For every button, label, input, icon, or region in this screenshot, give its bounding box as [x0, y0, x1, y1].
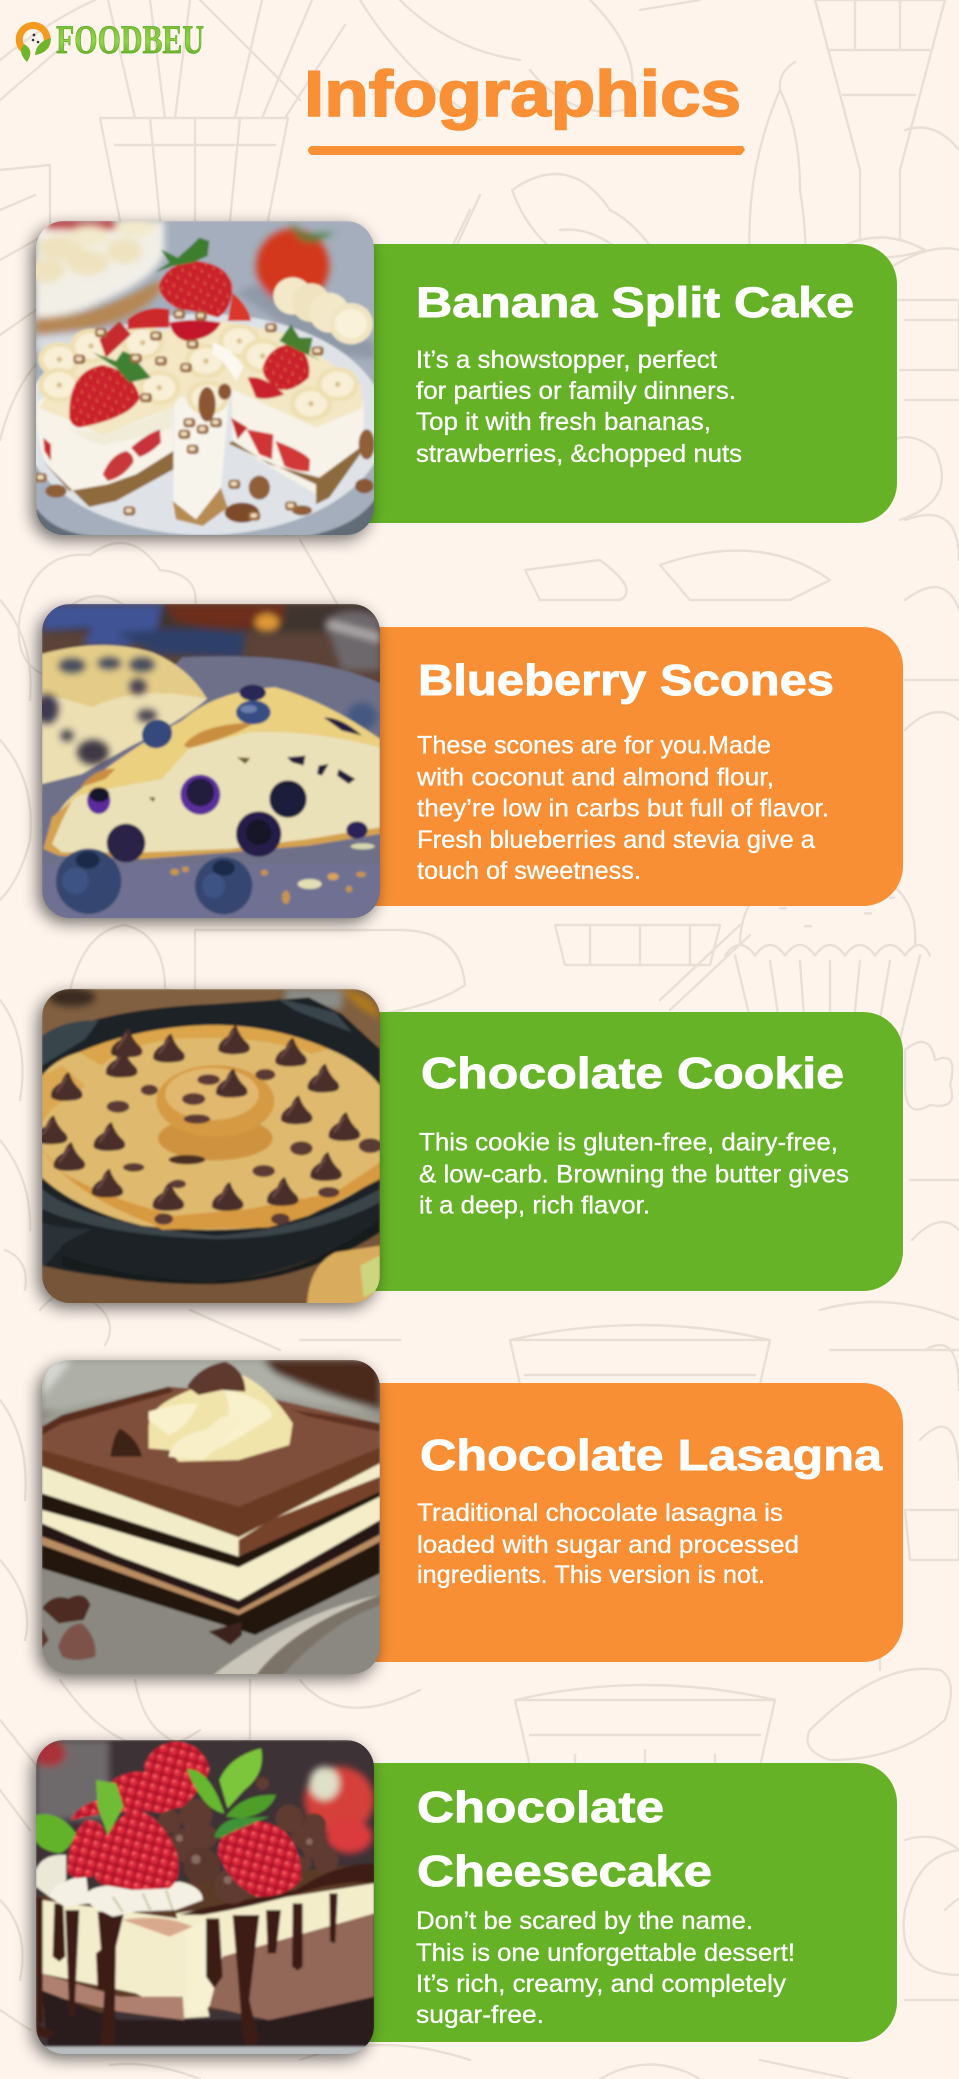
image shadow	[32, 226, 370, 540]
panel: blueberry scones	[35, 604, 903, 923]
description: for parties or family dinners.	[416, 377, 736, 405]
description: Fresh blueberries and stevia give a	[417, 826, 815, 854]
description: they’re low in carbs but full of flavor.	[417, 794, 829, 822]
heading: Cheesecake	[417, 1847, 712, 1896]
description: Top it with fresh bananas,	[416, 408, 711, 436]
description	[416, 1907, 795, 2029]
logo wordmark: FOODBEU	[56, 17, 204, 62]
heading: Banana Split Cake	[416, 279, 854, 327]
title underline	[308, 146, 745, 155]
heading	[417, 1783, 712, 1896]
card	[340, 627, 903, 906]
heading: Chocolate Lasagna	[420, 1431, 883, 1480]
card	[340, 1763, 897, 2042]
description	[419, 1128, 849, 1220]
image shadow	[32, 1745, 370, 2059]
panel: chocolate lasagna	[38, 1360, 903, 1679]
description: touch of sweetness.	[417, 857, 641, 885]
description: strawberries, &chopped nuts	[416, 440, 742, 468]
photo: chocolate cookie	[36, 988, 382, 1305]
card	[340, 1012, 903, 1291]
photo: blueberry scones	[35, 604, 382, 920]
heading: Blueberry Scones	[418, 656, 834, 705]
photo: chocolate lasagna	[42, 1360, 382, 1676]
logo icon	[19, 25, 51, 62]
description: Traditional chocolate lasagna is	[417, 1499, 783, 1527]
description: sugar-free.	[416, 2001, 544, 2029]
description: loaded with sugar and processed	[417, 1531, 799, 1559]
description	[417, 1499, 799, 1589]
image shadow	[38, 609, 376, 923]
card	[340, 244, 897, 523]
description: It’s rich, creamy, and completely	[416, 1970, 787, 1998]
heading: Chocolate Cookie	[421, 1049, 844, 1098]
description: it a deep, rich flavor.	[419, 1192, 650, 1220]
description: Don’t be scared by the name.	[416, 1907, 753, 1935]
description	[416, 732, 829, 885]
description: ingredients. This version is not.	[417, 1561, 765, 1589]
photo: chocolate cheesecake	[33, 1740, 376, 2056]
panel: chocolate cookie	[36, 988, 903, 1308]
card	[340, 1383, 903, 1662]
image shadow	[38, 994, 376, 1308]
description: This cookie is gluten-free, dairy-free,	[419, 1128, 838, 1156]
description: & low-carb. Browning the butter gives	[419, 1160, 849, 1188]
panel: chocolate cheesecake	[32, 1740, 897, 2059]
description	[416, 346, 742, 468]
description: with coconut and almond flour,	[416, 764, 774, 792]
description: It’s a showstopper, perfect	[416, 346, 717, 374]
photo: banana split cake	[23, 218, 386, 537]
panel: banana split cake	[23, 218, 897, 540]
heading: Chocolate	[417, 1783, 664, 1832]
description: These scones are for you.Made	[417, 732, 771, 760]
title: Infographics	[304, 57, 741, 130]
image shadow	[38, 1365, 376, 1679]
description: This is one unforgettable dessert!	[416, 1939, 795, 1967]
logo	[19, 17, 204, 62]
